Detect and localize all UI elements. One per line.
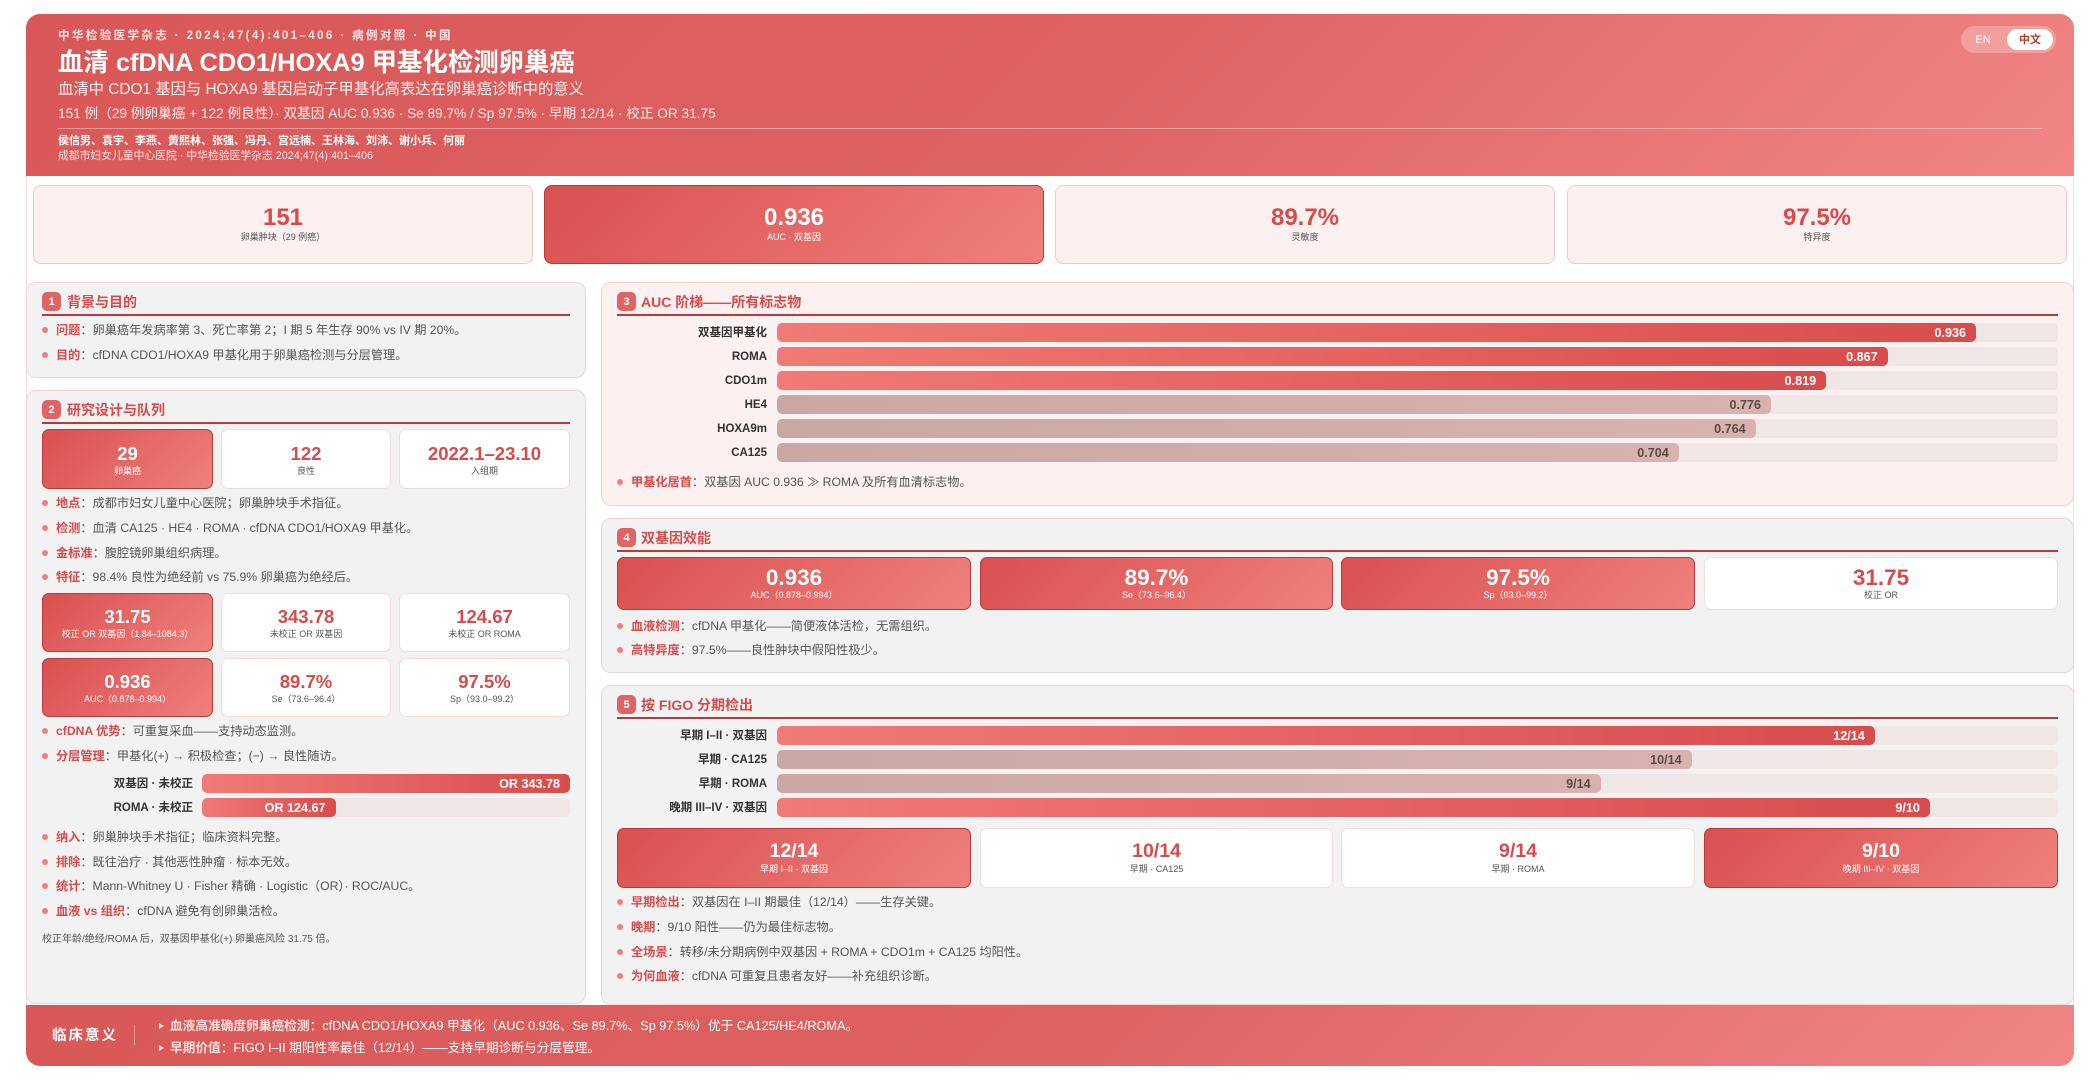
stat: 122 xyxy=(221,429,391,489)
affiliation: 成都市妇女儿童中心医院 · 中华检验医学杂志 2024;47(4):401–406 xyxy=(58,150,373,162)
main title: 血清 cfDNA CDO1/HOXA9 甲基化检测卵巢癌 xyxy=(58,49,575,77)
heading 2: 研究设计与队列 xyxy=(67,402,165,418)
stat: 9/14 xyxy=(1341,828,1695,888)
header banner xyxy=(26,14,2074,176)
bullet: late stage: 晚期：9/10 阳性——仍为最佳标志物。 xyxy=(631,920,841,934)
stat: specificity xyxy=(399,658,570,717)
stat: Se: Se（73.6–96.4） xyxy=(1122,590,1191,600)
bar: early dual 12/14 xyxy=(777,726,2058,745)
badge 1 xyxy=(42,292,61,311)
toggle active 中文 xyxy=(2007,29,2053,50)
label: ROMA: ROMA xyxy=(732,351,767,363)
bullet: inclusion: 纳入：卵巢肿块手术指征；临床资料完整。 xyxy=(56,830,288,844)
stat: crude OR dual gene xyxy=(221,593,391,652)
stat: 10/14: 10/14 xyxy=(1132,840,1181,862)
OR bar: dual gene xyxy=(202,774,570,793)
label: CA125: CA125 xyxy=(731,447,767,459)
bullet: stratified management: 分层管理：甲基化(+) → 积极检查；(−) → 良性随访。 xyxy=(56,749,344,763)
panel 4: dual gene performance xyxy=(601,518,2074,673)
stat: sensitivity: Se（73.6–96.4） xyxy=(271,694,341,704)
panel 5: detection by FIGO stage xyxy=(601,685,2074,1005)
stat: 12/14: 早期 I–II · 双基因 xyxy=(760,864,828,874)
bullet: whole scenario: 全场景：转移/未分期病例中双基因 + ROMA + CDO1m + CA125 均阳性。 xyxy=(631,945,1028,959)
stat: AUC: 0.936 xyxy=(766,565,822,590)
badge 5 xyxy=(617,695,636,714)
label: HE4: HE4 xyxy=(745,399,767,411)
stat: 9/10 xyxy=(1704,828,2058,888)
badge 2 xyxy=(42,400,61,419)
bar: early dual 12/14: 12/14 xyxy=(1833,729,1865,743)
OR bar: ROMA xyxy=(202,798,570,817)
bar: early CA125 10/14: 10/14 xyxy=(1650,753,1682,767)
KPI: 0.936: 0.936 xyxy=(764,204,824,231)
footer line 2: 早期价值：FIGO I–II 期阳性率最佳（12/14）——支持早期诊断与分层管理。 xyxy=(170,1041,600,1055)
stat: crude OR dual gene: 343.78 xyxy=(278,606,334,627)
bar: HE4 0.776 xyxy=(777,395,2058,414)
stat: 122: 良性 xyxy=(297,466,315,476)
stat: sensitivity: 89.7% xyxy=(280,671,332,692)
stat: AUC: 0.936 xyxy=(104,671,151,692)
label: late dual: 晚期 III–IV · 双基因 xyxy=(669,802,767,814)
stat: Sp: Sp（93.0–99.2） xyxy=(1483,590,1553,600)
label: early dual: 早期 I–II · 双基因 xyxy=(680,730,767,742)
badge 1: 1 xyxy=(48,296,55,308)
bullet: assay: 检测：血清 CA125 · HE4 · ROMA · cfDNA CDO1/HOXA9 甲基化。 xyxy=(56,521,418,535)
OR bar label: dual gene: 双基因 · 未校正 xyxy=(114,778,193,790)
KPI: 97.5%: 97.5% xyxy=(1783,204,1851,231)
KPI: 89.7% xyxy=(1055,185,1555,264)
stat: adjusted OR: 31.75 xyxy=(1853,565,1909,590)
footer heading: 临床意义 xyxy=(52,1028,118,1044)
stat: 122: 122 xyxy=(291,443,321,464)
KPI: 151: 151 xyxy=(263,204,303,231)
AUC bar chart xyxy=(698,323,2058,462)
OR bar: ROMA: OR 124.67 xyxy=(265,801,326,815)
heading 1: 背景与目的 xyxy=(67,294,137,310)
stat: 29 xyxy=(42,429,213,489)
stat: 9/14: 早期 · ROMA xyxy=(1492,864,1544,874)
heading 4: 双基因效能 xyxy=(641,530,711,546)
stat: crude OR ROMA: 124.67 xyxy=(456,606,513,627)
panel 2: study design and cohort xyxy=(26,390,586,1004)
stat: AUC: AUC（0.878–0.994） xyxy=(750,590,838,600)
bullet: blood test: 血液检测：cfDNA 甲基化——简便液体活检，无需组织。 xyxy=(631,619,937,633)
bullet: aim: 目的：cfDNA CDO1/HOXA9 甲基化用于卵巢癌检测与分层管理。 xyxy=(56,348,407,362)
stat: 12/14 xyxy=(617,828,971,888)
bullet: why blood: 为何血液：cfDNA 可重复且患者友好——补充组织诊断。 xyxy=(631,969,937,983)
stat: enrolment period: 入组期 xyxy=(471,466,498,476)
bar: ROMA 0.867: 0.867 xyxy=(1846,350,1878,364)
bar: early ROMA 9/14: 9/14 xyxy=(1566,777,1591,791)
bar: HOXA9m 0.764 xyxy=(777,419,2058,438)
stat: adjusted OR: 31.75 xyxy=(104,606,151,627)
bar: dual gene 0.936: 0.936 xyxy=(1934,326,1966,340)
badge 5: 5 xyxy=(623,699,630,711)
footer line 1: 血液高准确度卵巢癌检测：cfDNA CDO1/HOXA9 甲基化（AUC 0.936、Se 89.7%、Sp 97.5%）优于 CA125/HE4/ROMA。 xyxy=(170,1019,858,1033)
KPI: 89.7%: 89.7% xyxy=(1271,204,1339,231)
bar: late dual 9/10 xyxy=(777,798,2058,817)
footnote: 校正年龄/绝经/ROMA 后，双基因甲基化(+) 卵巢癌风险 31.75 倍。 xyxy=(42,934,336,945)
bar: CDO1m 0.819 xyxy=(777,371,2058,390)
bar: CDO1m 0.819: 0.819 xyxy=(1785,374,1816,388)
stat: crude OR ROMA: 未校正 OR ROMA xyxy=(448,629,521,639)
KPI: 89.7%: 灵敏度 xyxy=(1291,232,1318,242)
bar: HE4 0.776: 0.776 xyxy=(1730,398,1761,412)
OR bar label: ROMA: ROMA · 未校正 xyxy=(114,802,193,814)
stat: Sp xyxy=(1341,557,1695,610)
journal line: 中华检验医学杂志 · 2024;47(4):401–406 · 病例对照 · 中国 xyxy=(58,30,453,42)
stat: AUC xyxy=(617,557,971,610)
label: HOXA9m: HOXA9m xyxy=(717,423,767,435)
stat: AUC xyxy=(42,658,213,717)
stat: 29: 29 xyxy=(117,443,138,464)
KPI: 0.936: AUC · 双基因 xyxy=(767,232,821,242)
bar: ROMA 0.867 xyxy=(777,347,2058,366)
KPI: 0.936 xyxy=(544,185,1044,264)
stat: 9/10: 晚期 III–IV · 双基因 xyxy=(1843,864,1919,874)
stat: adjusted OR: 校正 OR 双基因（1.84–1084.3） xyxy=(62,629,193,639)
authors: 侯信男、袁宇、李燕、黄熙林、张强、冯丹、宫远楠、王林海、刘沛、谢小兵、何丽 xyxy=(58,135,465,147)
bullet: gold standard: 金标准：腹腔镜卵巢组织病理。 xyxy=(56,546,227,560)
bar: late dual 9/10: 9/10 xyxy=(1895,801,1920,815)
bar: dual gene 0.936 xyxy=(777,323,2058,342)
bullet: statistics: 统计：Mann-Whitney U · Fisher 精确 · Logistic（OR）· ROC/AUC。 xyxy=(56,879,420,893)
OR bar: dual gene: OR 343.78 xyxy=(499,777,560,791)
stat: enrolment period xyxy=(399,429,570,489)
bar: early CA125 10/14 xyxy=(777,750,2058,769)
stat: 9/10: 9/10 xyxy=(1862,840,1900,862)
KPI: 97.5% xyxy=(1567,185,2067,264)
stat: AUC: AUC（0.878–0.994） xyxy=(84,694,171,704)
panel 1: background and aim xyxy=(26,282,586,378)
bullet: exclusion: 排除：既往治疗 · 其他恶性肿瘤 · 标本无效。 xyxy=(56,855,297,869)
toggle active 中文: 中文 xyxy=(2019,34,2041,46)
stat: 9/14: 9/14 xyxy=(1499,840,1537,862)
label: early CA125: 早期 · CA125 xyxy=(698,754,767,766)
badge 4: 4 xyxy=(623,532,630,544)
toggle EN: EN xyxy=(1975,34,1991,46)
bullet: cfDNA advantage: cfDNA 优势：可重复采血——支持动态监测。 xyxy=(56,724,303,738)
subtitle: 血清中 CDO1 基因与 HOXA9 基因启动子甲基化高表达在卵巢癌诊断中的意义 xyxy=(58,81,584,98)
stat: crude OR dual gene: 未校正 OR 双基因 xyxy=(270,629,342,639)
bar: CA125 0.704 xyxy=(777,443,2058,462)
bullet: problem: 问题：卵巢癌年发病率第 3、死亡率第 2；I 期 5 年生存 90% vs IV 期 20%。 xyxy=(56,323,466,337)
bullet: features: 特征：98.4% 良性为绝经前 vs 75.9% 卵巢癌为绝经后。 xyxy=(56,570,358,584)
KPI: 151 xyxy=(33,185,533,264)
bar: early ROMA 9/14 xyxy=(777,774,2058,793)
bullet: high specificity: 高特异度：97.5%——良性肿块中假阳性极少。 xyxy=(631,643,885,657)
FIGO bar chart xyxy=(669,726,2058,817)
stat: specificity: 97.5% xyxy=(458,671,511,692)
stat: 29: 卵巢癌 xyxy=(114,466,141,476)
stat: 12/14: 12/14 xyxy=(770,840,818,862)
label: CDO1m: CDO1m xyxy=(725,375,767,387)
heading 3: AUC 阶梯——所有标志物 xyxy=(641,294,801,310)
KPI: 97.5%: 特异度 xyxy=(1803,232,1830,242)
KPI: 151: 卵巢肿块（29 例癌） xyxy=(241,232,325,242)
bar: CA125 0.704: 0.704 xyxy=(1637,446,1669,460)
stat: adjusted OR: 校正 OR xyxy=(1864,590,1898,600)
bar: HOXA9m 0.764: 0.764 xyxy=(1714,422,1746,436)
bullet: methylation first: 甲基化居首：双基因 AUC 0.936 ≫ ROMA 及所有血清标志物。 xyxy=(631,475,972,489)
bullet: site: 地点：成都市妇女儿童中心医院；卵巢肿块手术指征。 xyxy=(56,496,348,510)
bullet: blood vs tissue: 血液 vs 组织：cfDNA 避免有创卵巢活检。 xyxy=(56,904,285,918)
stat: specificity: Sp（93.0–99.2） xyxy=(450,694,519,704)
bullet: early detection: 早期检出：双基因在 I–II 期最佳（12/14）——生存关键。 xyxy=(631,895,941,909)
stat: sensitivity xyxy=(221,658,391,717)
badge 4 xyxy=(617,528,636,547)
footer: clinical significance xyxy=(26,1005,2074,1066)
badge 2: 2 xyxy=(48,404,55,416)
stat: 10/14 xyxy=(980,828,1333,888)
stat: 10/14: 早期 · CA125 xyxy=(1130,864,1183,874)
stat: adjusted OR xyxy=(42,593,213,652)
heading 5: 按 FIGO 分期检出 xyxy=(641,697,753,713)
panel 3: AUC ladder xyxy=(601,282,2074,506)
badge 3: 3 xyxy=(623,296,630,308)
key summary line: 151 例（29 例卵巢癌 + 122 例良性）· 双基因 AUC 0.936 · Se 89.7% / Sp 97.5% · 早期 12/14 · 校正 OR 31.75 xyxy=(58,106,716,121)
label: early ROMA: 早期 · ROMA xyxy=(699,778,767,790)
stat: crude OR ROMA xyxy=(399,593,570,652)
stat: adjusted OR xyxy=(1704,557,2058,610)
stat: Sp: 97.5% xyxy=(1486,565,1550,590)
label: dual gene: 双基因甲基化 xyxy=(698,327,767,339)
language toggle xyxy=(1961,26,2056,53)
stat: Se: 89.7% xyxy=(1125,565,1188,590)
stat: Se xyxy=(980,557,1333,610)
badge 3 xyxy=(617,292,636,311)
stat: enrolment period: 2022.1–23.10 xyxy=(428,443,541,464)
